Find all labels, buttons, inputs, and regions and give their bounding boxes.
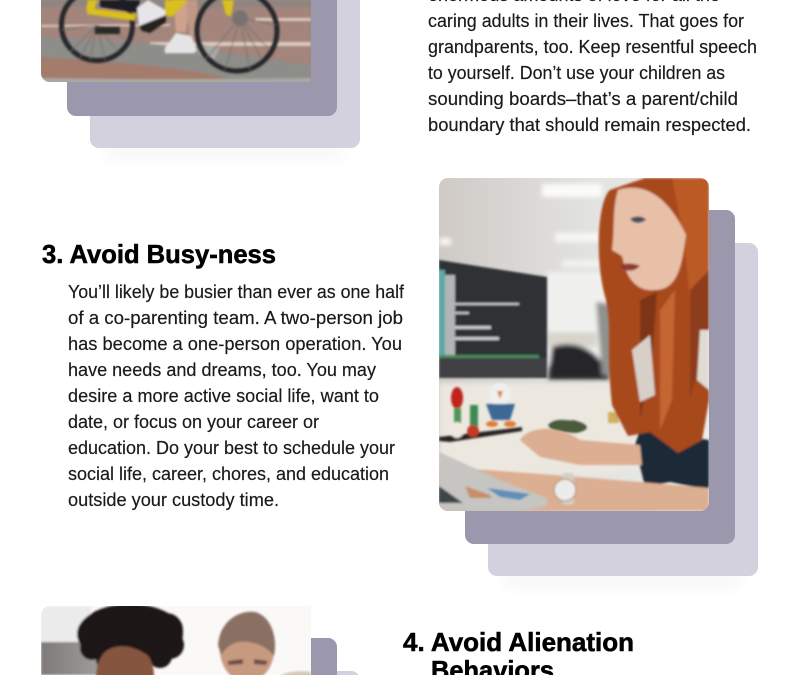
laptop (439, 452, 547, 511)
text block: section 3 body: You’ll likely be busier than ever as one half (68, 282, 405, 302)
text block: section 3 body: education. Do your best to schedule your (68, 438, 395, 458)
photo: person with yellow bicycle (41, 0, 311, 84)
text block: section 3 body: have needs and dreams, too. You may (68, 360, 376, 380)
heading: 3. Avoid Busy-ness: 3. Avoid Busy-ness (42, 239, 276, 269)
desk items (439, 383, 619, 442)
dark backing card (465, 210, 735, 544)
dark backing card (67, 638, 337, 675)
light backing card (488, 243, 758, 588)
panel: section 4 image stack (41, 604, 360, 675)
panel: section 3 image stack (439, 178, 758, 588)
monitor (439, 260, 547, 378)
heading: 4. Avoid Alienation Behaviors (403, 627, 634, 675)
text block: section 2 continuation: caring adults in their lives. That goes for (428, 11, 744, 31)
text block: section 3 body: has become a one-person operation. You (68, 334, 402, 354)
text block: section 3 body: desire a more active social life, want to (68, 386, 379, 406)
photo: two people looking down (41, 604, 311, 675)
text block: section 3 body: of a co-parenting team. A two-person job (68, 308, 403, 328)
text block: section 3 body: outside your custody time. (68, 490, 279, 510)
text block: section 3 body: social life, career, chores, and education (68, 464, 389, 484)
text block: section 3 body: date, or focus on your career or (68, 412, 319, 432)
text block: section 2 continuation: grandparents, too. Keep resentful speech (428, 37, 757, 57)
watch (554, 473, 576, 505)
photo: woman with red hair at a desk (439, 178, 709, 511)
text block: section 2 continuation: sounding boards–that’s a parent/child (428, 89, 738, 109)
panel: section 2 image stack (41, 0, 360, 160)
text block: section 2 continuation: boundary that should remain respected. (428, 115, 751, 135)
woman (439, 178, 709, 511)
heading: 4. Avoid Alienation Behaviors: 4. Avoid Alienation (403, 627, 634, 657)
light backing card (90, 671, 360, 675)
text block: section 2 continuation (428, 0, 757, 135)
dark backing card (67, 0, 337, 116)
light backing card (90, 0, 360, 160)
text block: section 3 body (68, 282, 405, 510)
text block: section 2 continuation: to yourself. Don’t use your children as (428, 63, 725, 83)
